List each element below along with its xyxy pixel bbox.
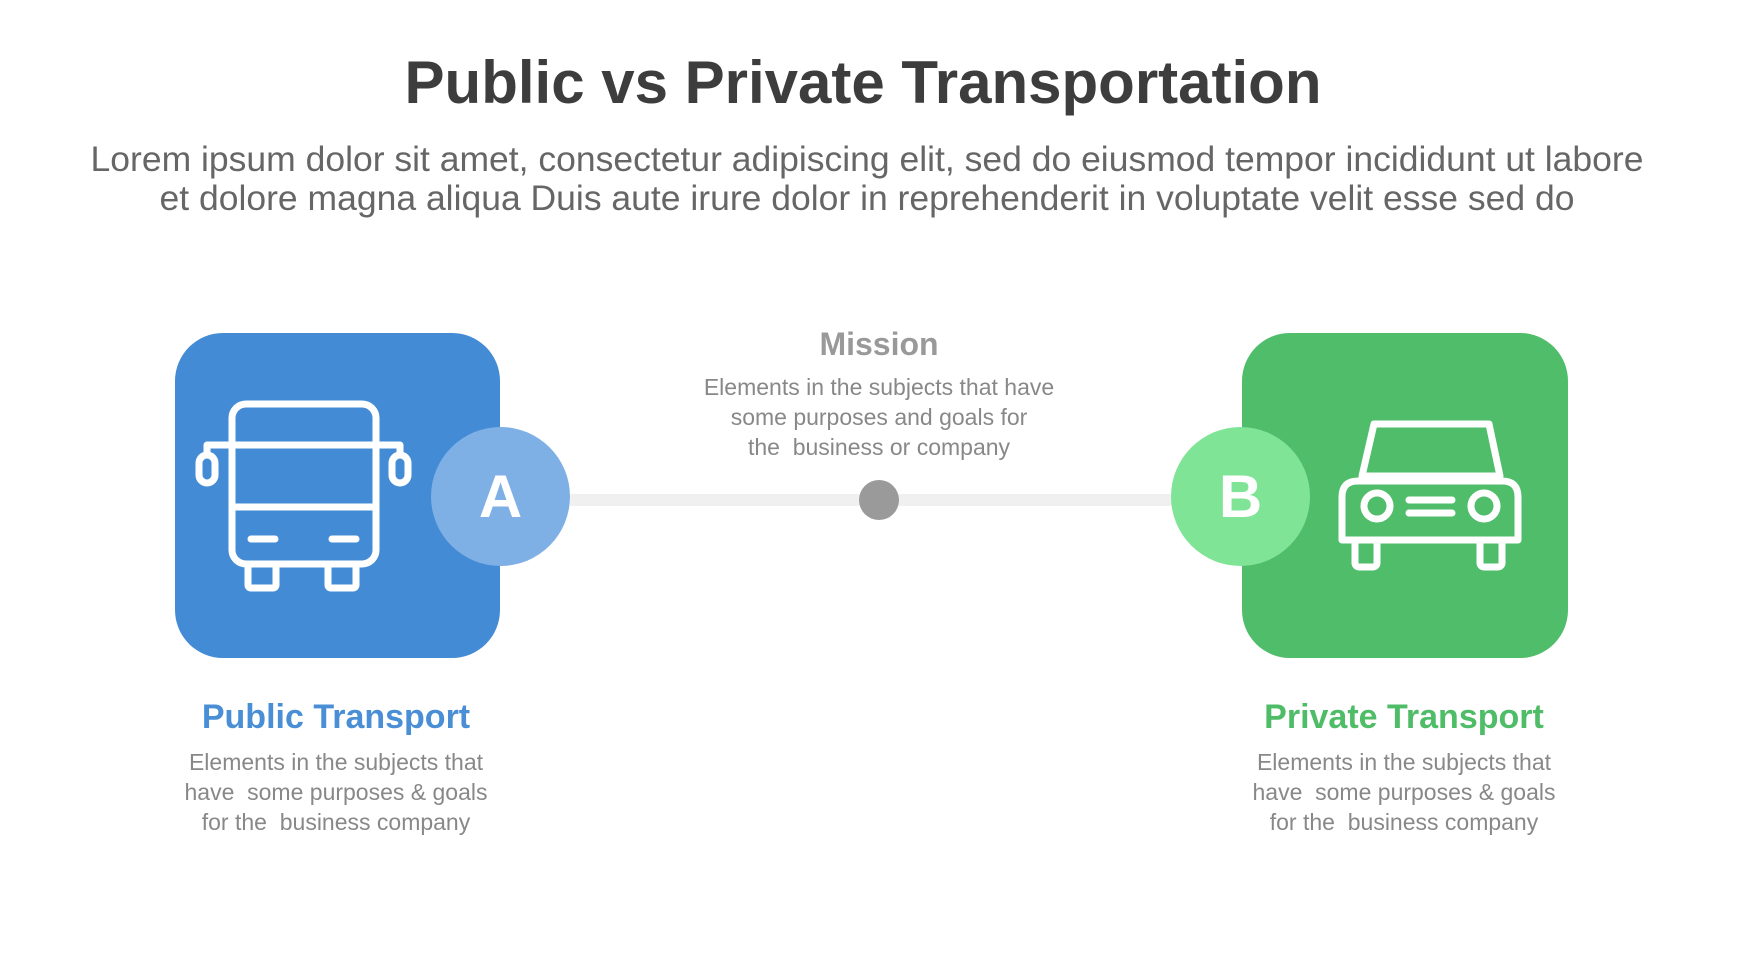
text: public transport: for the business company (202, 809, 470, 835)
icon: car (1338, 420, 1522, 570)
text: private transport (1252, 749, 1556, 835)
panel: private transport icon box (1242, 333, 1568, 658)
badge A: A (479, 463, 522, 530)
icon: bus (196, 400, 412, 592)
heading: public transport: Public Transport (202, 698, 470, 736)
mission text: the business or company (748, 434, 1010, 460)
title: Public vs Private Transportation (405, 49, 1321, 116)
text: private transport: have some purposes & goals (1252, 779, 1556, 805)
badge B: B (1219, 463, 1262, 530)
text: public transport: Elements in the subjects that (189, 749, 483, 775)
mission text: some purposes and goals for (731, 404, 1027, 430)
text: public transport (184, 749, 488, 835)
heading: private transport: Private Transport (1264, 698, 1544, 736)
text: private transport: for the business company (1270, 809, 1538, 835)
mission heading: Mission (819, 326, 939, 362)
center dot (859, 480, 899, 520)
badge A (431, 427, 570, 566)
panel: public transport icon box (175, 333, 500, 658)
connector line (570, 494, 1190, 506)
text: public transport: have some purposes & goals (184, 779, 488, 805)
subtitle: et dolore magna aliqua Duis aute irure dolor in reprehenderit in voluptate velit esse sed do (160, 178, 1574, 218)
mission text: Elements in the subjects that have (704, 374, 1054, 400)
subtitle: Lorem ipsum dolor sit amet, consectetur adipiscing elit, sed do eiusmod tempor incididunt ut labore (91, 139, 1643, 179)
mission text (704, 374, 1054, 460)
text: private transport: Elements in the subjects that (1257, 749, 1551, 775)
subtitle (91, 139, 1643, 218)
badge B (1171, 427, 1310, 566)
